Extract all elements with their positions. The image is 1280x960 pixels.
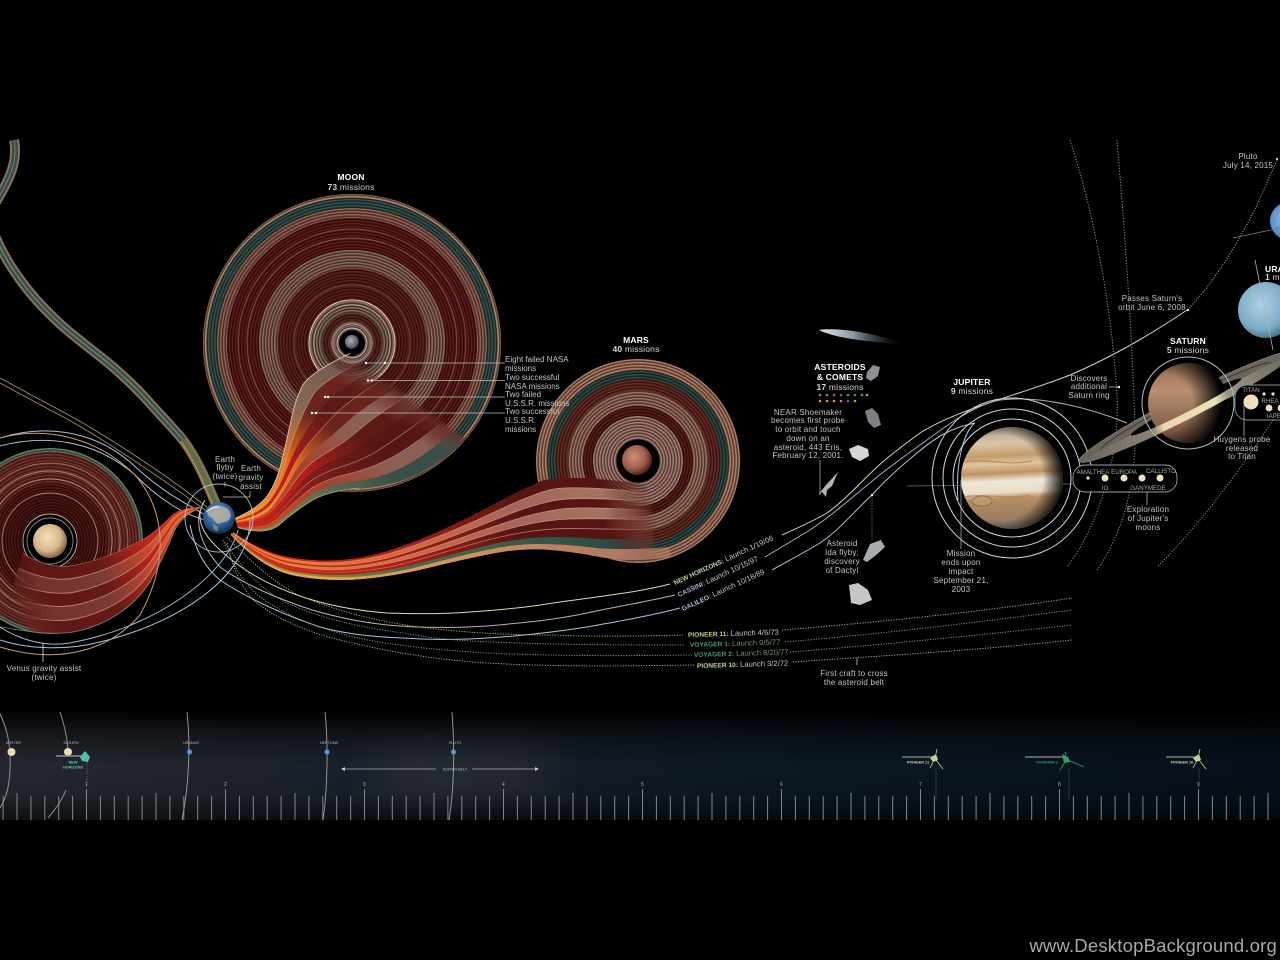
annotations: Earth: Earth xyxy=(215,455,235,464)
heading: Moon: MOON xyxy=(337,172,365,182)
Earth orbit loops and long-range trajectories xyxy=(0,433,680,655)
annotations: asteroids: becomes first probe xyxy=(771,416,845,425)
heading: Jupiter xyxy=(951,377,993,396)
annotations: asteroids: NEAR Shoemaker xyxy=(774,408,842,417)
scale planets: SATURN xyxy=(63,741,79,745)
scale numbers: 7 xyxy=(919,782,922,788)
annotations: outer planets: 2003 xyxy=(952,585,971,594)
Jupiter moons panel: CALLISTO xyxy=(1146,468,1176,475)
scale planets: NEPTUNE xyxy=(320,741,339,745)
heading: asteroids and comets: & COMETS xyxy=(817,372,863,382)
icon: Mars planet xyxy=(622,445,652,475)
annotation: Venus gravity assist: Venus gravity assist xyxy=(7,664,82,673)
Moon mission callouts: NASA missions xyxy=(505,382,560,391)
annotations: asteroids: First craft to cross xyxy=(820,669,888,678)
heading: Moon: 73 missions xyxy=(327,182,375,192)
scale planets: JUPITER xyxy=(5,741,21,745)
spacecraft launch labels: PIONEER 11: Launch 4/6/73 xyxy=(688,628,779,639)
Jupiter moons panel xyxy=(1073,465,1177,492)
annotations: Earth: Earth xyxy=(241,464,261,473)
planetary orbit arcs, dotted xyxy=(1067,140,1273,570)
annotations: outer planets: orbit June 6, 2008 xyxy=(1118,303,1186,312)
top-left trajectory arcs xyxy=(0,140,15,205)
annotations: outer planets: additional xyxy=(1071,382,1107,391)
annotations: outer planets: impact xyxy=(949,567,974,576)
Jupiter moons panel: GANYMEDE xyxy=(1130,485,1166,492)
Voyager 2 spacecraft xyxy=(1025,752,1084,800)
Moon mission callouts: missions xyxy=(505,364,536,373)
annotations: outer planets xyxy=(933,294,1271,594)
Pioneer 11 spacecraft xyxy=(902,749,943,800)
outer orbit trajectories xyxy=(765,160,1277,570)
heading: asteroids and comets xyxy=(814,362,868,402)
annotations: Earth: assist xyxy=(240,482,262,491)
heading: asteroids and comets: ASTEROIDS xyxy=(814,362,866,372)
annotations: asteroids xyxy=(771,408,888,687)
Moon mission rings xyxy=(203,194,501,560)
annotations: outer planets: of Jupiter's xyxy=(1128,514,1168,523)
annotations: outer planets: Saturn ring xyxy=(1068,391,1110,400)
Kuiper belt arrow: KUIPER BELT xyxy=(443,768,468,772)
heading: Moon xyxy=(327,172,375,192)
Venus mission rings xyxy=(0,448,200,634)
scale ticks xyxy=(0,788,1280,820)
scale numbers: 5 xyxy=(641,782,644,788)
annotation: Venus gravity assist xyxy=(7,643,82,682)
Kuiper belt arrow xyxy=(341,767,539,772)
Pioneer and Voyager dotted trajectories xyxy=(223,537,1072,666)
annotations: outer planets: Huygens probe xyxy=(1214,435,1271,444)
spacecraft launch labels xyxy=(672,534,789,670)
annotation: Venus gravity assist: (twice) xyxy=(32,673,57,682)
annotations: outer planets: September 21, xyxy=(933,576,989,585)
Jupiter moons panel: EUROPA xyxy=(1111,469,1138,476)
Moon mission callouts: U.S.S.R. missions xyxy=(505,399,569,408)
Mars ribbon from Earth xyxy=(230,478,672,580)
scale numbers: 8 xyxy=(1058,782,1061,788)
Voyager 2 spacecraft: VOYAGER 2 xyxy=(1036,760,1058,764)
Jupiter group xyxy=(907,398,1092,558)
watermark: www.DesktopBackground.org xyxy=(1028,935,1277,956)
annotations: outer planets: Discovers xyxy=(1071,374,1107,383)
annotations: outer planets: released xyxy=(1226,444,1258,453)
icon: Moon xyxy=(345,335,359,349)
distance scale band xyxy=(0,710,1280,820)
scale numbers: 6 xyxy=(780,782,783,788)
Pluto callout xyxy=(1223,152,1278,170)
heading: Saturn xyxy=(1167,336,1209,355)
icon: comet xyxy=(819,329,906,345)
scale planets: PLUTO xyxy=(449,741,461,745)
Jupiter moons panel: AMALTHEA xyxy=(1077,469,1110,476)
Moon mission callouts: Two successful xyxy=(505,407,559,416)
scale numbers: 9 xyxy=(1197,782,1200,788)
Venus ribbon from Earth xyxy=(0,507,200,634)
scale planets: URANUS xyxy=(183,741,199,745)
annotations: Earth: gravity xyxy=(239,473,263,482)
annotations: outer planets: Exploration xyxy=(1127,505,1169,514)
spacecraft launch labels: PIONEER 10: Launch 3/2/72 xyxy=(697,659,788,670)
New Horizons spacecraft: HORIZONS xyxy=(63,766,83,770)
icon: Earth xyxy=(203,502,235,534)
spacecraft launch labels: GALILEO: Launch 10/18/89 xyxy=(680,567,766,613)
Pioneer 10 spacecraft xyxy=(1166,749,1206,788)
heading: Jupiter: JUPITER xyxy=(953,377,991,387)
icons: asteroids xyxy=(818,365,885,605)
Moon ribbon from Earth xyxy=(235,353,466,532)
annotations: asteroids: down on an xyxy=(786,434,830,443)
annotations: asteroids: February 12, 2001. xyxy=(772,451,844,460)
Mars mission rings xyxy=(230,359,740,580)
Saturn moons panel: RHEA xyxy=(1261,398,1279,405)
annotations: asteroids: the asteroid belt xyxy=(824,678,885,687)
New Horizons spacecraft: NEW xyxy=(69,760,78,764)
heading: Mars xyxy=(612,335,660,354)
annotations: Earth: (twice) xyxy=(213,472,238,481)
Neptune group xyxy=(1233,202,1280,240)
spacecraft launch labels: VOYAGER 2: Launch 8/20/77 xyxy=(694,648,789,659)
scale numbers: 2 xyxy=(224,782,227,788)
heading: Jupiter: 9 missions xyxy=(951,386,993,396)
scale numbers: 4 xyxy=(502,782,505,788)
annotations: Earth: flyby xyxy=(216,463,234,472)
annotations: asteroids: of Dactyl xyxy=(826,566,858,575)
spacecraft launch labels: CASSINI: Launch 10/15/97 xyxy=(676,554,760,599)
Moon mission callouts: missions xyxy=(505,425,536,434)
heading: asteroids and comets: 17 missions xyxy=(816,382,864,392)
annotations: asteroids: discovery xyxy=(824,557,860,566)
Pioneer 11 spacecraft: PIONEER 11 xyxy=(907,760,929,764)
spacecraft launch labels: NEW HORIZONS: Launch 1/19/06 xyxy=(672,534,775,587)
trajectory bundle arriving at Earth from upper left xyxy=(0,228,217,520)
scale numbers: 1 xyxy=(85,782,88,788)
Saturn group xyxy=(1074,342,1280,472)
annotations: outer planets: Passes Saturn's xyxy=(1122,294,1182,303)
annotations: asteroids: to orbit and touch xyxy=(775,425,841,434)
scale planets xyxy=(5,741,461,756)
annotations: outer planets: to Titan xyxy=(1228,452,1256,461)
annotations: asteroids: asteroid, 443 Eris, xyxy=(774,443,842,452)
Moon mission callouts: U.S.S.R. xyxy=(505,416,536,425)
Moon mission callouts xyxy=(311,355,569,434)
annotations: asteroids: Asteroid xyxy=(827,539,857,548)
spacecraft launch labels: VOYAGER 1: Launch 9/5/77 xyxy=(690,638,780,649)
scale numbers: 3 xyxy=(363,782,366,788)
heading: Mars: MARS xyxy=(623,335,649,345)
Jupiter moons panel: IO xyxy=(1102,485,1108,492)
planet orbit arcs on scale xyxy=(0,712,454,820)
annotations: asteroids: Ida flyby; xyxy=(825,548,859,557)
icon: Venus planet xyxy=(33,524,67,558)
Pluto callout: July 14, 2015 xyxy=(1223,161,1273,170)
heading: Saturn: SATURN xyxy=(1170,336,1206,346)
scale numbers xyxy=(85,782,1200,788)
Moon mission callouts: Two successful xyxy=(505,373,559,382)
New Horizons spacecraft xyxy=(56,751,90,785)
Saturn moons panel xyxy=(1235,385,1280,420)
Uranus group xyxy=(1238,260,1280,350)
annotations: outer planets: ends upon xyxy=(941,558,981,567)
heading: Mars: 40 missions xyxy=(612,344,660,354)
Saturn moons panel: TITAN xyxy=(1242,387,1260,394)
Pioneer 10 spacecraft: PIONEER 10 xyxy=(1171,760,1193,764)
Pluto callout: Pluto xyxy=(1238,152,1258,161)
annotations: Earth xyxy=(213,455,263,497)
annotations: outer planets: moons xyxy=(1135,523,1161,532)
Moon mission callouts: Two failed xyxy=(505,390,541,399)
heading: Saturn: 5 missions xyxy=(1167,345,1209,355)
Moon mission callouts: Eight failed NASA xyxy=(505,355,569,364)
annotations: outer planets: Mission xyxy=(947,549,975,558)
